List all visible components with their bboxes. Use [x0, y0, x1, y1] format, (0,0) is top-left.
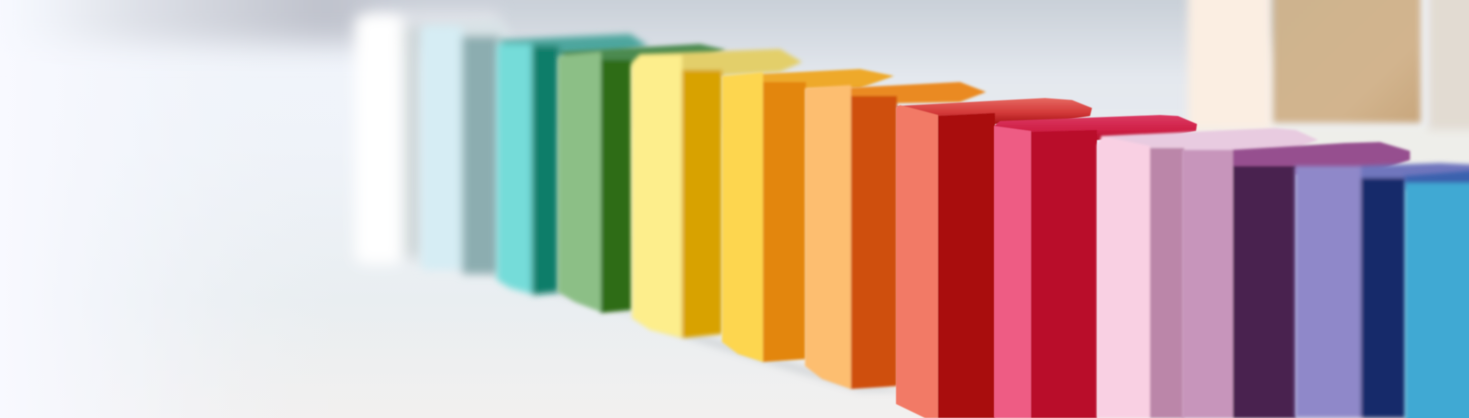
block: teal [497, 34, 648, 295]
block: green [558, 44, 726, 313]
block: white [355, 10, 500, 264]
contact shadows under blocks [400, 258, 905, 392]
block: red-orange [896, 98, 1092, 418]
background: blurred beige box [1186, 0, 1469, 166]
block: periwinkle [1295, 163, 1469, 418]
block: amber [722, 69, 894, 362]
block: pink [1097, 128, 1318, 418]
block: mauve [1182, 142, 1410, 418]
block: yellow [631, 49, 802, 338]
block: red [994, 115, 1197, 418]
block: blue [1405, 170, 1469, 418]
block: pale teal [420, 20, 512, 274]
block: orange [805, 82, 986, 389]
